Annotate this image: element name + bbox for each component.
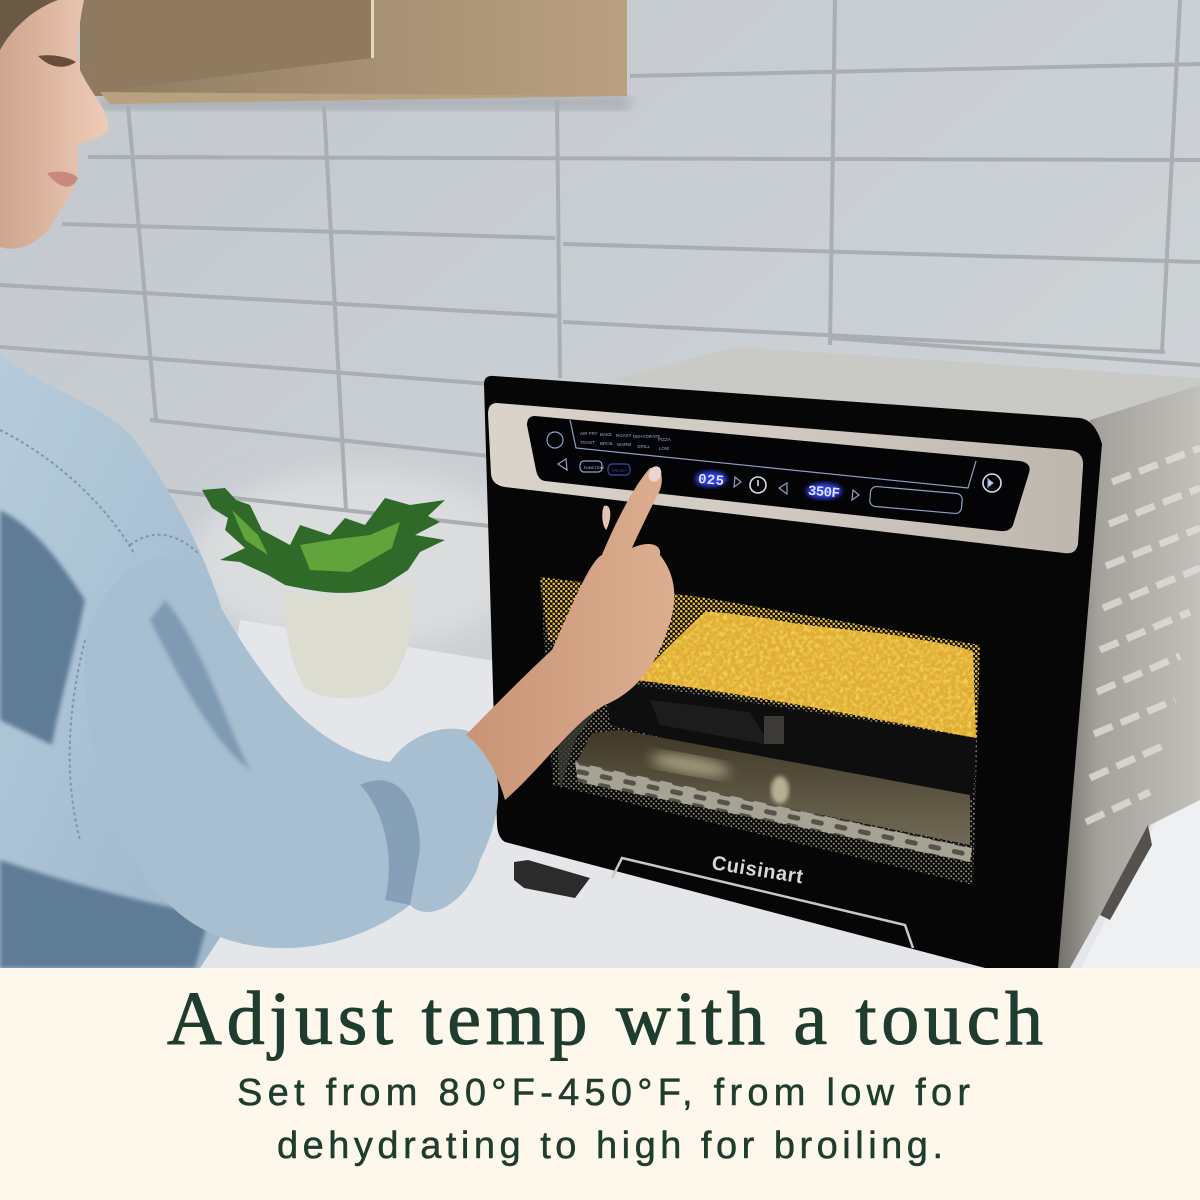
potted plant bbox=[202, 488, 445, 698]
hand and arm bbox=[466, 468, 674, 800]
mode labels: ROAST bbox=[616, 433, 632, 438]
heading: Adjust temp with a touch bbox=[167, 977, 1043, 1061]
plant leaves bbox=[202, 488, 445, 593]
countertop bbox=[190, 620, 1200, 970]
mode labels: PIZZA bbox=[658, 437, 671, 442]
mode labels: BAKE bbox=[600, 432, 612, 437]
sleeve shadow bbox=[150, 600, 250, 770]
hair bbox=[0, 0, 58, 50]
baked food tray bbox=[636, 612, 976, 738]
oven top panel bbox=[610, 347, 1200, 440]
mode labels: TOAST bbox=[580, 440, 595, 445]
mode labels: BROIL bbox=[600, 441, 614, 446]
description: Set from 80°F-450°F, from low for bbox=[237, 1072, 970, 1114]
upper wood cabinet bbox=[80, 0, 627, 104]
mode labels: AIR FRY bbox=[580, 431, 598, 436]
plant pot bbox=[284, 578, 413, 698]
oven window bbox=[540, 577, 980, 885]
shirt stitching bbox=[0, 430, 200, 840]
shirt torso bbox=[0, 352, 275, 968]
oven side with vents bbox=[1055, 385, 1200, 968]
mode labels: FUNCTION bbox=[584, 466, 604, 470]
fingernail bbox=[646, 464, 664, 484]
brand logo: Cuisinart bbox=[710, 852, 805, 888]
oven bbox=[484, 347, 1200, 968]
handle bbox=[612, 858, 913, 948]
mode labels: GRILL bbox=[637, 444, 651, 449]
touch icons bbox=[547, 432, 563, 448]
oven foot bbox=[514, 860, 590, 898]
mode labels: WARM bbox=[617, 442, 631, 447]
lips bbox=[47, 172, 78, 187]
oven front bbox=[484, 376, 1102, 968]
dark pan bbox=[605, 680, 976, 800]
inner oven floor bbox=[575, 730, 970, 845]
face and neck bbox=[0, 0, 108, 249]
shirt shadows bbox=[0, 510, 210, 968]
mode labels: PRESET bbox=[612, 469, 628, 473]
eye bbox=[38, 55, 76, 67]
description bbox=[237, 1072, 970, 1167]
wire rack bbox=[575, 762, 972, 862]
digital time and temperature: 025 bbox=[697, 472, 725, 490]
mode labels: DEHYDRATE bbox=[633, 434, 660, 439]
mode labels bbox=[580, 431, 671, 473]
sleeve bbox=[85, 558, 498, 948]
mode labels: LOW bbox=[659, 446, 670, 451]
woman bbox=[0, 0, 674, 968]
cuff shadow bbox=[360, 780, 420, 905]
control panel strip bbox=[488, 403, 1083, 553]
caption band bbox=[0, 968, 1200, 1200]
description: dehydrating to high for broiling. bbox=[277, 1125, 943, 1167]
digital time and temperature: 350F bbox=[807, 484, 840, 502]
digital time and temperature bbox=[695, 471, 842, 502]
